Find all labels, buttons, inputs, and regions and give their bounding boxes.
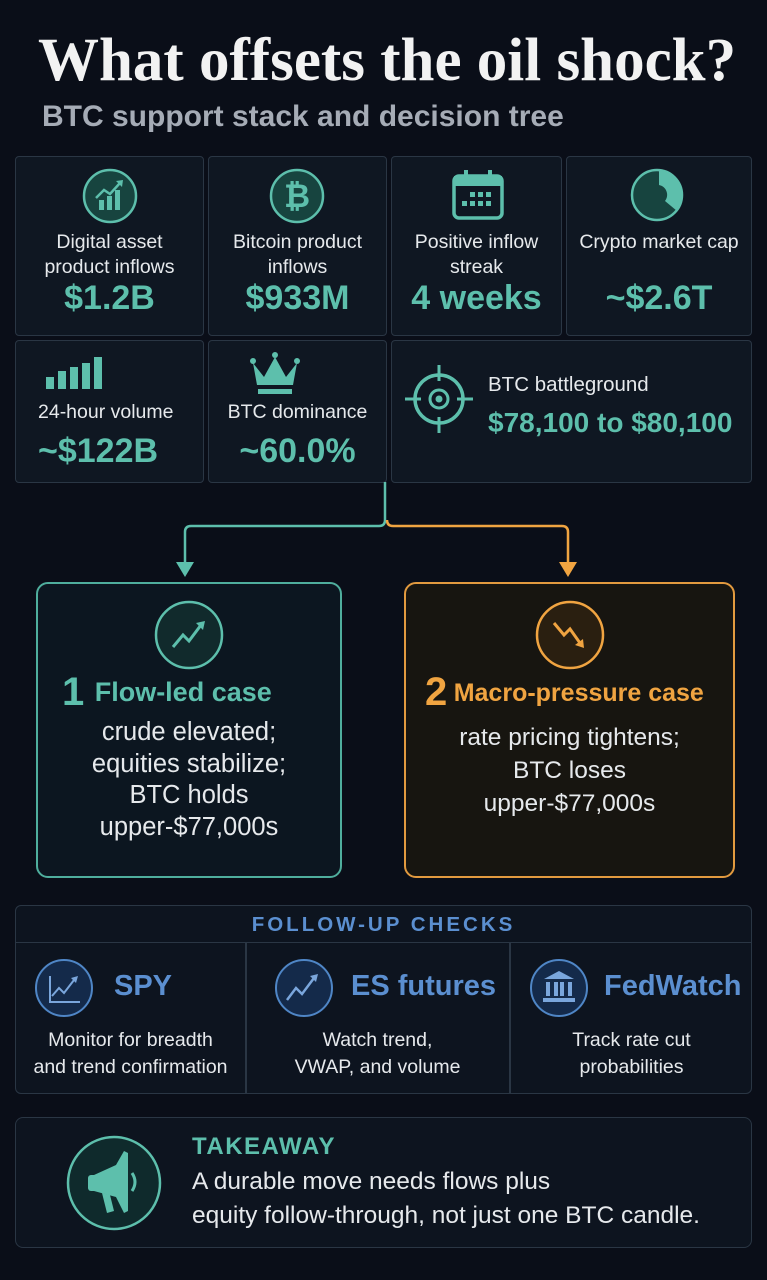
text: case 1 body: BTC holds (129, 781, 249, 809)
text: case 2 body: rate pricing tightens; (459, 724, 680, 751)
card: inflow streak (391, 156, 562, 336)
card: digital asset inflows (15, 156, 204, 336)
item: ES futures: VWAP, and volume (295, 1056, 460, 1078)
card: 24h volume: ~$122B (38, 432, 158, 470)
text: case 1 body: upper-$77,000s (100, 812, 278, 840)
heading: follow-up checks: FOLLOW-UP CHECKS (252, 913, 515, 936)
card: battleground (391, 340, 752, 483)
icon: ES chart (275, 959, 333, 1017)
text: case 1 body: equities stabilize; (92, 750, 286, 778)
card: bitcoin inflows: inflows (268, 256, 327, 278)
card: bitcoin inflows (208, 156, 387, 336)
subtitle: BTC support stack and decision tree (42, 100, 564, 133)
card: inflow streak: Positive inflow (415, 231, 538, 253)
icon: trend down (536, 600, 604, 670)
item: FedWatch: Track rate cut (572, 1029, 691, 1051)
icon: trend up (154, 600, 224, 670)
card: digital asset inflows: product inflows (44, 256, 175, 278)
title: What offsets the oil shock? (38, 27, 736, 94)
text: case 2 body: upper-$77,000s (484, 790, 655, 817)
item: SPY: Monitor for breadth (48, 1029, 213, 1051)
card: bitcoin inflows: Bitcoin product (233, 231, 362, 253)
text: takeaway body (192, 1168, 700, 1229)
icon: SPY chart (35, 959, 93, 1017)
arrows: decision tree connector (176, 482, 577, 577)
item: SPY (33, 959, 228, 1078)
panel: takeaway (15, 1117, 752, 1248)
heading: case 1: 1 Flow-led case (62, 670, 272, 714)
icon: bars (46, 357, 102, 389)
item: ES futures (275, 959, 496, 1078)
card: battleground: BTC battleground (488, 373, 649, 396)
text: case 1 body (92, 718, 286, 840)
item: ES futures: Watch trend, (323, 1029, 432, 1051)
icon: bitcoin (270, 168, 324, 224)
text: case 1 body: crude elevated; (102, 718, 276, 746)
item: FedWatch: probabilities (579, 1056, 684, 1078)
icon: megaphone (66, 1136, 162, 1230)
panel: follow-up checks (15, 905, 752, 1094)
card: market cap (566, 156, 752, 336)
text: case 2 body (459, 724, 680, 817)
item: SPY: SPY (114, 970, 172, 1002)
card: dominance: ~60.0% (239, 432, 356, 470)
icon: target (405, 365, 473, 433)
card: 24h volume: 24-hour volume (38, 401, 174, 423)
heading: case 2: 2 Macro-pressure case (425, 670, 704, 714)
panel: flow-led case (36, 582, 342, 878)
icon: chart circle (82, 168, 138, 224)
heading: takeaway: TAKEAWAY (192, 1133, 336, 1160)
icon: pie (630, 168, 684, 222)
card: bitcoin inflows: $933M (246, 279, 349, 317)
item: FedWatch (530, 959, 741, 1078)
card: dominance: BTC dominance (228, 401, 367, 423)
icon: calendar (452, 170, 504, 220)
icon: bank (530, 959, 588, 1017)
heading: follow-up checks (16, 906, 751, 943)
card: battleground: $78,100 to $80,100 (488, 407, 732, 438)
text: takeaway body: equity follow-through, not just one BTC candle. (192, 1202, 700, 1229)
icon: crown (250, 352, 300, 394)
item: FedWatch: FedWatch (604, 970, 741, 1002)
item: ES futures: ES futures (351, 970, 496, 1002)
card: digital asset inflows: $1.2B (64, 279, 155, 317)
item: SPY: and trend confirmation (33, 1056, 228, 1078)
card: inflow streak: 4 weeks (411, 279, 542, 317)
card: inflow streak: streak (450, 256, 503, 278)
panel: macro-pressure case (404, 582, 735, 878)
text: takeaway body: A durable move needs flows plus (192, 1168, 550, 1195)
card: dominance (208, 340, 387, 483)
card: 24h volume (15, 340, 204, 483)
text: case 2 body: BTC loses (513, 757, 626, 784)
card: digital asset inflows: Digital asset (56, 231, 163, 253)
card: market cap: Crypto market cap (579, 231, 739, 253)
card: market cap: ~$2.6T (606, 279, 712, 317)
icon: bitcoin: ₿ (284, 178, 310, 214)
